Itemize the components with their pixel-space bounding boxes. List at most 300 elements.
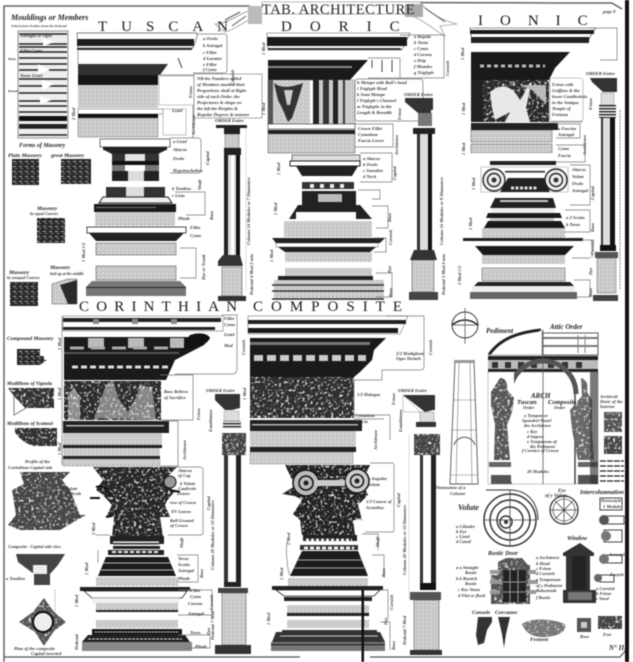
- annotations: Ovolo: [173, 156, 185, 161]
- annotations: Frieze: [391, 393, 396, 405]
- small Ionic column: [586, 71, 620, 301]
- annotations: Cyma: [190, 594, 202, 599]
- annotations: Frieze: [397, 108, 402, 120]
- small Doric column: [404, 92, 446, 300]
- annotations: b Astragal: [203, 43, 223, 48]
- panel: window: b Head: [536, 561, 550, 566]
- panel: window: a Cornish: [596, 586, 615, 591]
- annotations: of Sacrifice: [164, 395, 186, 400]
- small Doric column: ORDER Entire: [404, 92, 433, 97]
- annotations: b Ovolo: [363, 162, 378, 167]
- panel: console, corbel, festoon, rose, fret: Console: [472, 610, 491, 616]
- panel: window: a Architrave: [536, 555, 559, 560]
- annotations: Cyma: [190, 233, 202, 238]
- annotations: Leaves: [176, 491, 190, 496]
- annotations: Capital: [396, 492, 401, 507]
- annotations: c Lista: [172, 193, 185, 198]
- annotations: l Triglyph's Channel: [357, 98, 397, 103]
- small Doric column: Column 16 Modules or 8 Diameters: [439, 177, 444, 245]
- annotations: Scotia: [178, 562, 190, 567]
- annotations: Crown Fillet: [358, 126, 383, 131]
- panel: console, corbel, festoon, rose, fret: Rose: [580, 634, 589, 639]
- annotations: Fascia: [355, 419, 368, 424]
- small Tuscan column: Pedestal 4 Mod 2 min: [249, 253, 254, 295]
- heading: Tuscan: TUSCAN: [98, 19, 242, 35]
- diagram: volute: c Listel: [456, 534, 470, 539]
- small Corinthian column: Column 20 Modules or 10 Diameters: [210, 500, 215, 570]
- panel: window: Window: [567, 536, 588, 542]
- annotations: 1 Mod: [276, 162, 281, 175]
- annotations: Architrave: [191, 115, 196, 136]
- annotations: Fascia Lower: [358, 138, 384, 143]
- annotations: Length & Breadth: [356, 110, 392, 115]
- panel: modillions and capital details: Plan of the composite: [14, 646, 55, 651]
- annotations: Dye: [383, 618, 388, 626]
- annotations: 1 Mod: [57, 387, 62, 400]
- panel: Tuscan arch with Attic Order: the Architrave: [524, 423, 551, 428]
- annotations: 2 Mod: [286, 532, 291, 546]
- small Composite column: ORDER Entire: [398, 388, 427, 393]
- annotations: Regular Degrees & manner: [197, 112, 250, 117]
- panel: modillions and capital details: Modillions of Scamozi: [6, 422, 54, 427]
- panel: forms of masonry: [7, 143, 91, 306]
- panel: console, corbel, festoon, rose, fret: [472, 610, 627, 652]
- diagram: diminution of a column: Column: [450, 491, 466, 496]
- panel: modillions and capital details: [6, 336, 86, 656]
- annotations: b Volute: [180, 481, 195, 486]
- diagram: volute: Volute: [458, 503, 479, 512]
- annotations: Cornish: [389, 594, 394, 610]
- annotations: a Angular: [368, 476, 387, 481]
- annotations: d Larmier: [203, 56, 222, 61]
- panel: intercolumniation: [579, 490, 627, 582]
- annotations: a Ovolo: [203, 36, 218, 41]
- panel: modillions and capital details: b Volute: [62, 486, 77, 491]
- annotations: 1 Mod: [461, 142, 466, 155]
- annotations: h Metope with Bull's head: [357, 80, 407, 85]
- capital and shaft: [289, 155, 372, 219]
- frieze with bucranium and triglyphs: [268, 80, 355, 153]
- panel: forms of masonry: Masonry: [36, 206, 58, 212]
- annotations: Astragal: [571, 188, 589, 193]
- panel: Tuscan arch with Attic Order: a Tympan or: [524, 413, 548, 418]
- panel: Tuscan arch with Attic Order: Tuscan: [517, 399, 537, 406]
- panel: Tuscan arch with Attic Order: the Pediment: [530, 444, 556, 449]
- annotations: Cymatium: [358, 132, 378, 137]
- panel: rustic door: Rustic Door: [487, 551, 519, 557]
- small Corinthian column: Entablature: [208, 409, 213, 433]
- cornice: [77, 33, 197, 85]
- panel: Tuscan arch with Attic Order: ARCH: [530, 392, 551, 400]
- panel: mouldings and members: Astragal or Ogee: [19, 33, 52, 38]
- pedestal: [272, 221, 385, 300]
- annotations: Cyma: [558, 146, 570, 151]
- annotations: 1 Mod: [279, 567, 284, 580]
- panel: window: e Tympanum: [536, 577, 561, 582]
- panel: forms of masonry: laid up at the middle: [50, 271, 84, 276]
- annotations: Cornish: [445, 60, 450, 76]
- panel: Tuscan arch with Attic Order: d Impost: [527, 434, 544, 439]
- pen line across Composite pedestal: [362, 590, 364, 662]
- annotations: Dye or Trunk: [201, 254, 206, 281]
- annotations: Corona: [188, 601, 203, 606]
- panel: mouldings and members: Mouldings or Members: [10, 13, 88, 22]
- panel: mouldings and members: [8, 13, 88, 138]
- small Corinthian column: ORDER Entire: [206, 388, 235, 393]
- cornice: [470, 28, 617, 80]
- panel: forms of masonry: great Masonry: [50, 153, 85, 159]
- volute capital: [481, 161, 568, 192]
- annotations: Pedestal: [74, 633, 79, 650]
- panel: Tuscan arch with Attic Order: [486, 323, 598, 484]
- pedestal: [86, 212, 186, 296]
- icon: pediment construction circle: [452, 308, 478, 344]
- heading: Ionic: IONIC: [478, 13, 605, 29]
- annotations: Cornish: [241, 339, 246, 355]
- panel: Tuscan arch with Attic Order: c Key: [527, 429, 538, 434]
- caryatid right: [570, 378, 594, 460]
- annotations: Cornish: [590, 239, 595, 255]
- annotations: Bass Relievo: [163, 389, 189, 394]
- panel: Tuscan arch with Attic Order: Order: [554, 405, 565, 410]
- annotations: the left the Heights &: [197, 106, 238, 111]
- annotations: Astragal: [557, 132, 575, 137]
- cornice: [248, 316, 408, 377]
- annotations: lower Candlesticks: [552, 94, 588, 99]
- annotations: 1 Mod: [261, 42, 266, 55]
- annotations: Fillet: [190, 588, 201, 593]
- cornice with modillions: [63, 316, 223, 380]
- panel: console, corbel, festoon, rose, fret: Fret: [603, 632, 612, 637]
- plan of capital: [19, 598, 66, 646]
- annotations: Base: [590, 223, 595, 233]
- annotations: Mod: [223, 343, 233, 348]
- annotations: 2 Mod: [71, 107, 76, 121]
- panel: intercolumniation: Intercolumnation: [579, 490, 624, 496]
- annotations: c Cyma: [414, 46, 429, 51]
- Ionic pedestal: [463, 238, 583, 299]
- annotations: [261, 34, 450, 298]
- annotations: Ovolo: [572, 181, 584, 186]
- annotations: Shaft: [375, 536, 380, 547]
- annotations: Capital: [206, 495, 211, 510]
- small Ionic column: ORDER Entire: [586, 71, 615, 76]
- panel: Doric order detail: [261, 33, 450, 300]
- panel: forms of masonry: Plain Masonry: [8, 153, 42, 159]
- annotations: NB the Numbers added: [196, 76, 242, 81]
- small Tuscan column: Column 14 Modules or 7 Diameters: [246, 177, 251, 245]
- annotations: 1 Mod: [273, 202, 278, 215]
- annotations: 1 Mod: [57, 337, 62, 350]
- annotations: 2 Mod 1/2: [457, 265, 462, 286]
- annotations: c Annulets: [363, 168, 383, 173]
- small Composite column: Column 20 Modules or 10 Diameters: [402, 505, 407, 575]
- sacrifice frieze: [64, 380, 161, 420]
- annotations: [71, 34, 262, 281]
- annotations: 1 Mod 1/2: [81, 242, 86, 262]
- panel: Tuscan order detail: [71, 33, 262, 296]
- annotations: Volute: [572, 174, 584, 179]
- annotations: Shaft: [179, 537, 184, 548]
- small Composite column: [398, 388, 442, 655]
- panel: intercolumniation: Pyenostyle: [601, 498, 621, 503]
- annotations: Volute: [368, 482, 380, 487]
- annotations: Frieze: [188, 86, 193, 98]
- annotations: 1 Mod: [468, 217, 473, 230]
- panel: Tuscan arch with Attic Order: 20 Modules: [526, 469, 549, 474]
- annotations: 1 Mod: [266, 612, 271, 625]
- panel: mouldings and members: Fillet Cyma: [20, 48, 43, 53]
- Corinthian base: [96, 536, 178, 586]
- annotations: Cornish: [428, 339, 433, 355]
- annotations: 1 Mod: [84, 562, 89, 575]
- annotations: c Fillet: [203, 50, 217, 55]
- annotations: Griffons & the: [552, 88, 580, 93]
- annotations: d Neck: [363, 174, 377, 179]
- Corinthian pedestal: [80, 587, 192, 651]
- annotations: Plinth: [178, 216, 190, 221]
- annotations: Dye: [206, 628, 211, 636]
- small Composite column: Pedestal 7 Mod: [402, 615, 407, 645]
- panel: Tuscan arch with Attic Order: Pediment: [486, 327, 514, 335]
- annotations: a Listel: [173, 139, 188, 144]
- annotations: 1 Mod: [460, 47, 465, 60]
- small Corinthian column: [206, 388, 251, 654]
- annotations: of Crown: [170, 523, 188, 528]
- annotations: i Triglyph Head: [357, 86, 388, 91]
- annotations: 1/2 Halogue: [357, 392, 380, 397]
- annotations: in the Antique: [552, 100, 579, 105]
- panel: modillions and capital details: Compound Masonry: [7, 336, 54, 342]
- annotations: Bell Ground: [169, 518, 194, 523]
- panel: rustic door: a a Straight: [456, 565, 479, 570]
- annotations: row of Crown: [170, 500, 196, 505]
- Ionic base: [482, 198, 565, 238]
- architrave: [63, 421, 169, 466]
- panel: window: c Frieze: [536, 566, 551, 571]
- annotations: Architrave: [582, 135, 587, 156]
- annotations: Base: [391, 641, 396, 651]
- annotations: Listel: [171, 108, 183, 113]
- annotations: Cornish: [388, 229, 393, 245]
- panel: forms of masonry: Forms of Masonry: [19, 143, 66, 149]
- annotations: Fillet: [190, 225, 201, 230]
- panel: console, corbel, festoon, rose, fret: Corcanne: [495, 610, 518, 616]
- annotations: [457, 47, 595, 298]
- panel: window: of y Pediment: [536, 583, 563, 588]
- page note: page 9: [602, 9, 616, 14]
- panel: Tuscan arch with Attic Order: e Tympanum of: [527, 439, 557, 444]
- annotations: Fillet: [224, 316, 235, 321]
- annotations: XV Leaves: [170, 509, 191, 514]
- annotations: f Cyma: [203, 67, 217, 72]
- annotations: Cymatium: [355, 413, 375, 418]
- panel: Ionic order detail: [457, 28, 617, 299]
- panel: intercolumniation: Eustyle: [609, 572, 624, 577]
- annotations: Base: [199, 569, 204, 579]
- diagram: eye of the volute: Eye: [557, 489, 567, 494]
- panel: rustic door: Rustic: [465, 570, 477, 575]
- heading: Composite: COMPOSITE: [253, 299, 410, 315]
- annotations: Torus: [178, 556, 189, 561]
- annotations: a 2 Scotia: [566, 215, 585, 220]
- title ribbon: TAB. ARCHITECTURE: [262, 2, 415, 18]
- annotations: Cornish: [230, 69, 235, 85]
- griffin frieze: [471, 80, 549, 122]
- panel: window: d Cornish: [536, 571, 555, 576]
- annotations: Base: [588, 288, 593, 298]
- panel: window: f Rustic: [536, 595, 551, 600]
- annotations: Abacus: [172, 147, 187, 152]
- panel: modillions and capital details: Profile of the: [25, 459, 50, 464]
- panel: console, corbel, festoon, rose, fret: N° III: [608, 644, 627, 652]
- annotations: e Drip: [414, 58, 427, 63]
- panel: Tuscan arch with Attic Order: Composite: [548, 399, 576, 406]
- annotations: Base: [209, 211, 214, 221]
- annotations: a Abacus: [363, 156, 381, 161]
- panel: Tuscan arch with Attic Order: Order: [523, 405, 534, 410]
- panel: Composite order detail: [242, 316, 433, 651]
- panel: Tuscan arch with Attic Order: f Cornice of Crown: [522, 448, 559, 453]
- panel: window: c Stool: [596, 596, 610, 601]
- panel: modillions and capital details: Composite · Capital side view: [8, 544, 61, 549]
- annotations: Architrave: [182, 440, 187, 461]
- panel: modillions and capital details: Capital inverted: [31, 651, 62, 656]
- composite pedestal: [271, 586, 385, 651]
- annotations: Frieze: [588, 98, 593, 110]
- diagram: volute: a Cilindre: [456, 524, 475, 529]
- annotations: a Regula: [414, 34, 432, 39]
- architrave: [471, 123, 558, 160]
- annotations: Torus: [190, 630, 201, 635]
- annotations: Ogee Dentels: [396, 356, 421, 361]
- annotations: Shaft: [197, 179, 202, 190]
- cornice: [267, 33, 410, 80]
- annotations: Plinth: [178, 576, 190, 581]
- diagram: volute: d Canal: [456, 539, 472, 544]
- annotations: Proportions shall at Right: [197, 88, 247, 93]
- annotations: b Tenia: [414, 40, 429, 45]
- annotations: Listel: [223, 332, 235, 337]
- panel: intercolumniation: Areostyle: [608, 552, 627, 557]
- annotations: Architrave: [373, 430, 378, 451]
- architrave: [250, 420, 362, 464]
- annotations: Abacus: [571, 167, 586, 172]
- panel: intercolumniation: 1 Module: [603, 504, 621, 509]
- heading: Doric: DORIC: [281, 19, 418, 35]
- panel: window: Balustrade: [535, 588, 557, 593]
- panel: mouldings and members: Round: [8, 89, 18, 93]
- annotations: Base: [388, 288, 393, 298]
- annotations: Fascia: [558, 153, 571, 158]
- acanthus capital: [90, 467, 180, 537]
- heading: Corinthian: CORINTHIAN: [79, 299, 244, 315]
- panel: console, corbel, festoon, rose, fret: Festoon: [530, 637, 548, 643]
- small Corinthian column: Pedestal 7 Mod: [210, 610, 215, 640]
- annotations: Dye: [588, 268, 593, 276]
- title ribbon: [215, 2, 457, 36]
- panel: Tuscan arch with Attic Order: Attic Order: [549, 323, 583, 331]
- frieze and architrave: [78, 85, 163, 137]
- annotations: 1/2 Course of: [366, 499, 392, 504]
- panel: modillions and capital details: Modillions of Vignola: [6, 382, 53, 387]
- annotations: Capital: [205, 150, 210, 165]
- panel: mouldings and members: Which form Profiles from the Pedestal: [11, 24, 67, 28]
- annotations: Cyma: [224, 322, 236, 327]
- annotations: Frieze with: [552, 82, 574, 87]
- annotations: [57, 315, 246, 650]
- panel: Corinthian order detail: [57, 315, 246, 651]
- annotations: Frieze: [196, 408, 201, 420]
- annotations: Fortuna: [552, 112, 569, 117]
- annotations: of Cap: [178, 473, 191, 478]
- panel: window: b Frieze: [596, 591, 611, 596]
- panel: rustic door: b b Rustick: [456, 576, 478, 581]
- panel: forms of masonry: Masonry: [49, 265, 71, 271]
- small Tuscan column: [215, 118, 254, 301]
- annotations: 1 Mod: [74, 594, 79, 607]
- panel: Tuscan arch with Attic Order: Spandrel Panel: [522, 418, 552, 423]
- annotations: Temple of: [552, 106, 571, 111]
- annotations: f Mutules: [414, 64, 432, 69]
- annotations: Abacus: [177, 468, 192, 473]
- annotations: 1 Mod: [242, 387, 247, 400]
- annotations: side of each Order. the: [196, 94, 240, 99]
- panel: Caryatid side notes: [599, 394, 624, 484]
- annotations: of Members marked their: [197, 82, 245, 87]
- foliage frieze: [250, 377, 354, 418]
- small Tuscan column: ORDER Entire: [215, 118, 244, 123]
- annotations: Caulicole: [178, 486, 196, 491]
- annotations: d Corona: [414, 52, 432, 57]
- panel: rustic door: d Flat or flush: [458, 593, 486, 598]
- annotations: 1 Mod: [261, 102, 266, 115]
- annotations: Capital: [590, 185, 595, 200]
- annotations: 2/2 Modiglioni: [395, 351, 425, 356]
- annotations: Base: [387, 213, 392, 223]
- diagram: eye of the volute: of y Volute: [545, 494, 568, 499]
- annotations: 1 Mod: [471, 177, 476, 190]
- annotations: b Tondino: [172, 186, 192, 191]
- composite capital: [282, 465, 370, 535]
- panel: rustic door: c Key Stone: [458, 587, 480, 592]
- capital and shaft: [94, 139, 176, 212]
- diagram: volute: [456, 490, 538, 546]
- panel: Caryatid side notes: Archivolt: [599, 394, 618, 399]
- panel: modillions and capital details: Corinthian Capital side: [8, 465, 52, 470]
- annotations: Projectures & shape on: [197, 100, 242, 105]
- composite base: [288, 535, 368, 586]
- annotations: 1 Mod: [269, 249, 274, 262]
- annotations: a Fasciae: [558, 126, 576, 131]
- annotations: Capital: [392, 165, 397, 180]
- panel: rustic door: Rustic: [465, 581, 477, 586]
- caryatid left: [490, 372, 514, 482]
- panel: Caryatid side notes: Interior: [599, 404, 615, 409]
- small Doric column: Pedestal 5 Mod 4 min: [441, 253, 446, 295]
- annotations: Base: [381, 568, 386, 578]
- annotations: m Triglyphs in the: [357, 104, 392, 109]
- annotations: Plinth: [195, 644, 207, 649]
- annotations: k Semi Metope: [357, 92, 385, 97]
- annotations: g Triglyph: [413, 70, 434, 75]
- panel: Caryatid side notes: Doric of the: [599, 399, 623, 404]
- panel: modillions and capital details: a Tondino: [6, 576, 26, 581]
- diagram: diminution of a column: Diminution of a: [434, 485, 466, 490]
- annotations: Dye: [387, 266, 392, 274]
- annotations: b Torus: [566, 222, 580, 227]
- diagram: diminution of a column: [434, 360, 478, 496]
